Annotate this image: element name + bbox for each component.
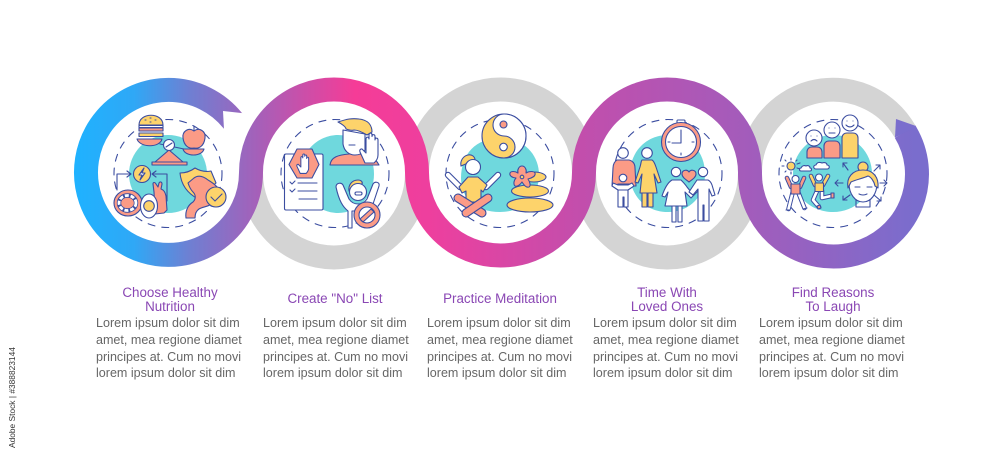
sun and clouds [782, 158, 829, 174]
column 4: time with loved ones [593, 285, 739, 380]
body text 3: amet, mea regione diamet [427, 333, 573, 347]
body text 4 [593, 316, 739, 380]
icon 4: time with loved ones [612, 120, 722, 228]
body text 3: lorem ipsum dolor sit dim [427, 366, 566, 380]
vertical stock id: Adobe Stock | #388823144 [7, 347, 17, 448]
body text 5: lorem ipsum dolor sit dim [759, 366, 898, 380]
icon 2: create no list [281, 119, 389, 228]
gray ribbon segments [251, 90, 905, 258]
body text 2: Lorem ipsum dolor sit dim [263, 316, 407, 330]
heading 4 [631, 285, 703, 314]
icon 1: healthy nutrition [114, 115, 226, 228]
carrot [153, 182, 167, 214]
body text 1: amet, mea regione diamet [96, 333, 242, 347]
smiling face with arrows [835, 162, 887, 207]
yin yang [482, 114, 526, 158]
arrows to energy [117, 171, 167, 201]
body text 2: amet, mea regione diamet [263, 333, 409, 347]
egg [140, 194, 158, 218]
body text 2: principes at. Cum no movi [263, 350, 408, 364]
energy bolt [134, 166, 150, 182]
body text 2: lorem ipsum dolor sit dim [263, 366, 402, 380]
jumping person 1 [786, 176, 807, 210]
body text 1: Lorem ipsum dolor sit dim [96, 316, 240, 330]
body text 4: amet, mea regione diamet [593, 333, 739, 347]
parent with child [612, 148, 636, 207]
body text 4: lorem ipsum dolor sit dim [593, 366, 732, 380]
body text 2 [263, 316, 409, 380]
heading 4: Loved Ones [631, 299, 703, 314]
jumping person 2 [811, 174, 834, 209]
clock [662, 120, 700, 162]
heading 5 [792, 285, 874, 314]
baby with raised arms [336, 180, 380, 228]
column 1: choose healthy nutrition [96, 285, 242, 380]
column 2: create no list [263, 291, 409, 380]
couple with heart [662, 167, 715, 222]
heading 5: Find Reasons [792, 285, 874, 300]
apple on scale [183, 126, 205, 155]
body text 3: principes at. Cum no movi [427, 350, 572, 364]
heading 4: Time With [637, 285, 697, 300]
mood faces and bars [806, 115, 858, 158]
mother [635, 148, 661, 207]
meditating person [448, 155, 498, 213]
body text 1 [96, 316, 242, 380]
heading 1 [122, 285, 218, 314]
column 5: find reasons to laugh [759, 285, 905, 380]
stomach and shield [180, 168, 226, 218]
body text 4: principes at. Cum no movi [593, 350, 738, 364]
stones and flower [507, 166, 553, 212]
heading 3: Practice Meditation [443, 291, 557, 306]
heading 1: Choose Healthy [122, 285, 218, 300]
body text 3: Lorem ipsum dolor sit dim [427, 316, 571, 330]
man with raised hand [330, 119, 379, 165]
heading 1: Nutrition [145, 299, 195, 314]
heading 5: To Laugh [805, 299, 861, 314]
scale base [152, 140, 187, 165]
body text 1: lorem ipsum dolor sit dim [96, 366, 235, 380]
gradient ribbon [86, 89, 917, 257]
body text 5: Lorem ipsum dolor sit dim [759, 316, 903, 330]
body text 5: amet, mea regione diamet [759, 333, 905, 347]
steak [114, 190, 142, 216]
body text 4: Lorem ipsum dolor sit dim [593, 316, 737, 330]
body text 3 [427, 316, 573, 380]
column 3: practice meditation [427, 291, 573, 380]
body text 1: principes at. Cum no movi [96, 350, 241, 364]
icon 3: practice meditation [446, 114, 554, 228]
icon 5: find reasons to laugh [779, 115, 887, 228]
burger on scale [137, 115, 184, 149]
body text 5 [759, 316, 905, 380]
clipboard with checklist [284, 149, 323, 210]
body text 5: principes at. Cum no movi [759, 350, 904, 364]
heading 2: Create "No" List [287, 291, 383, 306]
